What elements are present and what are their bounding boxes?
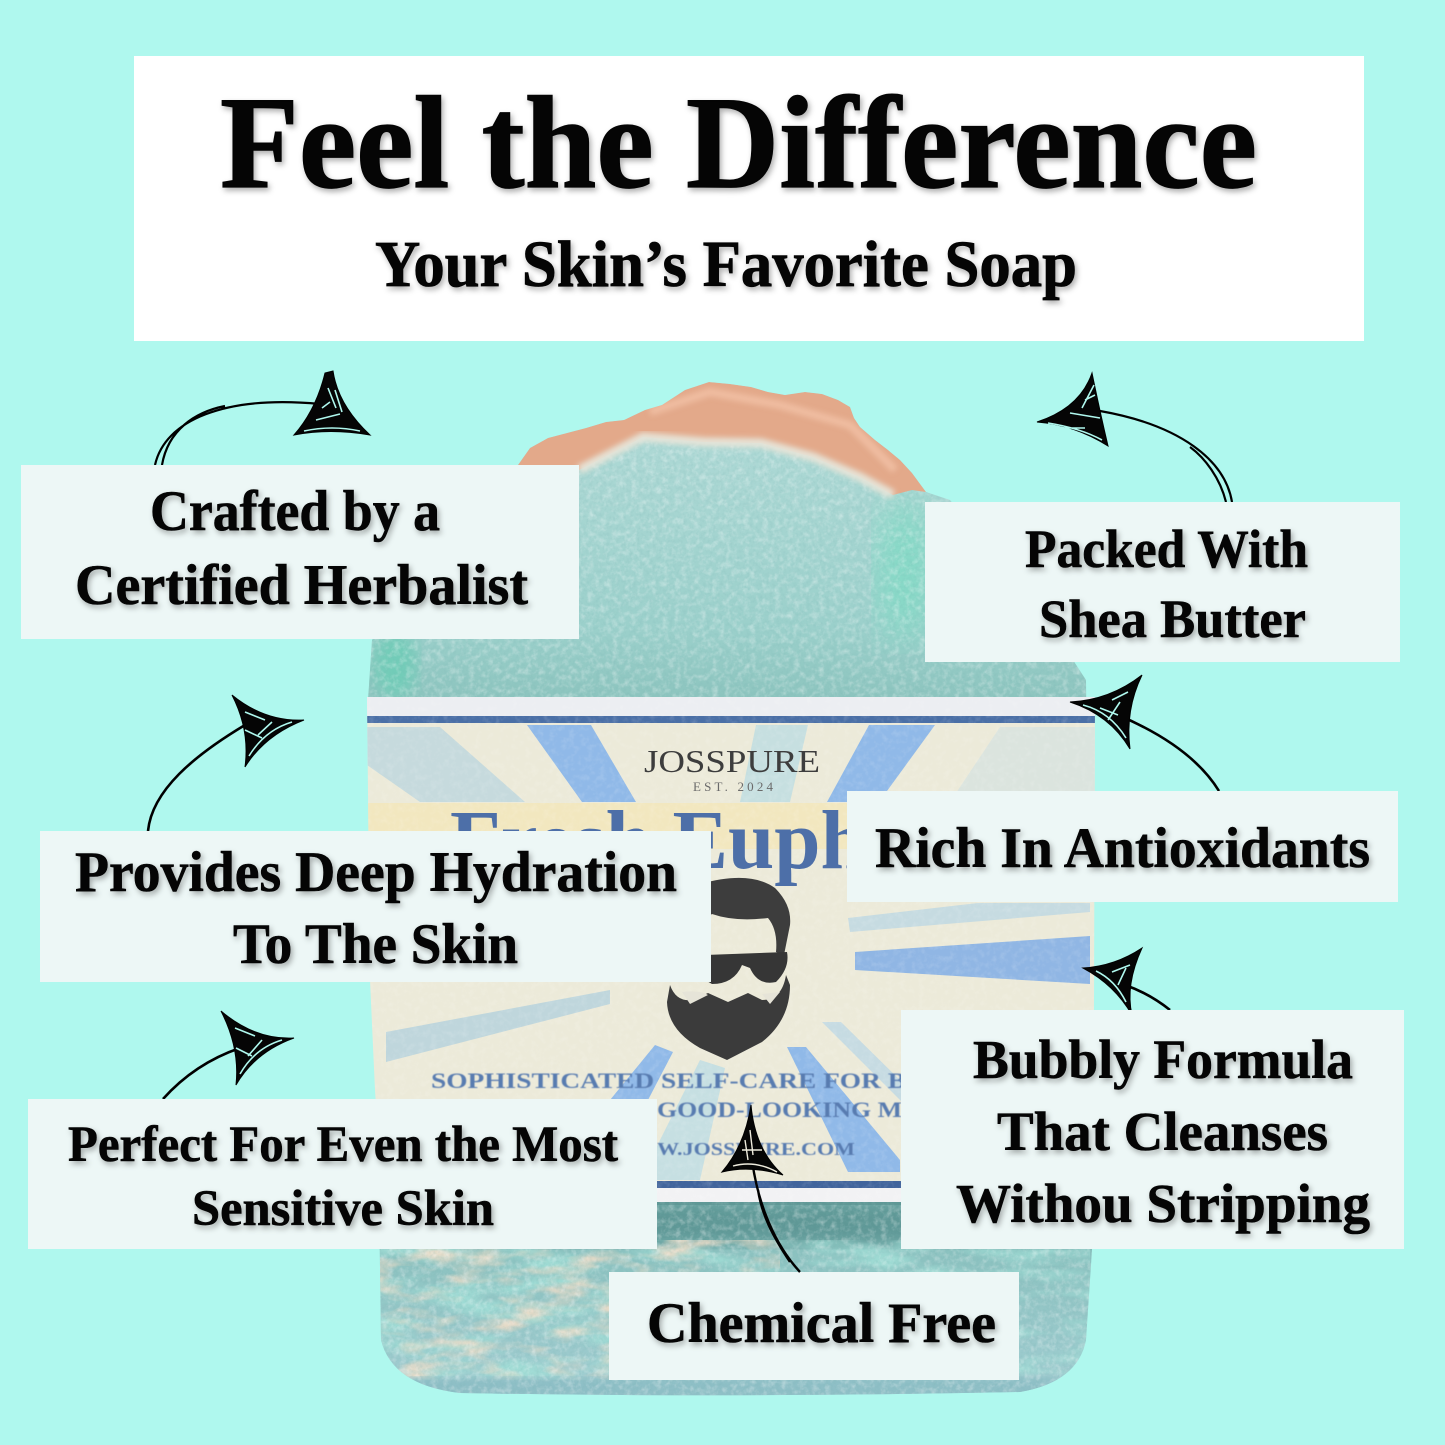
panel: deep hydration <box>40 831 711 982</box>
text line 1: Bubbly Formula <box>973 1029 1353 1090</box>
label text: website: W.JOSSPURE.COM <box>657 1139 855 1159</box>
product label <box>367 697 1095 1205</box>
main heading: Feel the Difference <box>220 69 1257 216</box>
sunglasses <box>705 952 788 984</box>
label text: product name: Fresh Euphoria <box>450 794 1010 887</box>
text line 2: Certified Herbalist <box>75 554 528 617</box>
subheading: Your Skin’s Favorite Soap <box>375 228 1077 301</box>
label text: tagline 1: SOPHISTICATED SELF-CARE FOR B <box>431 1068 906 1093</box>
arrow: chemical free <box>722 1105 800 1272</box>
text line 2: Sensitive Skin <box>192 1181 494 1237</box>
text line 2: To The Skin <box>233 913 518 976</box>
panel: crafted by a herbalist <box>21 465 579 639</box>
panel: sensitive skin <box>28 1099 657 1249</box>
title panel <box>134 56 1364 341</box>
panel: bubbly formula <box>901 1010 1404 1249</box>
text line 1: Provides Deep Hydration <box>75 841 677 904</box>
text line 3: Withou Stripping <box>956 1173 1370 1234</box>
label rays <box>367 725 1095 1180</box>
text: Rich In Antioxidants <box>875 817 1370 880</box>
label text: brand: JOSSPURE <box>644 743 820 779</box>
text: Chemical Free <box>647 1292 996 1355</box>
panel: chemical free <box>609 1272 1019 1380</box>
arrow: deep hydration <box>148 695 304 831</box>
text line 2: Shea Butter <box>1039 589 1306 649</box>
beard <box>667 975 790 1060</box>
text line 1: Crafted by a <box>150 480 440 543</box>
label text: tagline 2: GOOD-LOOKING M <box>657 1097 902 1122</box>
arrow: crafted by a herbalist <box>155 371 370 465</box>
text line 1: Packed With <box>1025 519 1308 579</box>
peach top layer <box>510 382 926 495</box>
label text: established: EST. 2024 <box>693 779 774 794</box>
soap bar photo <box>360 370 1100 1400</box>
panel: rich in antioxidants <box>847 791 1398 902</box>
hair <box>711 878 790 952</box>
text line 2: That Cleanses <box>997 1101 1328 1162</box>
arrow: sensitive skin <box>163 1011 294 1099</box>
text line 1: Perfect For Even the Most <box>68 1117 618 1173</box>
panel: packed with shea butter <box>925 502 1400 662</box>
arrow: packed with shea butter <box>1037 373 1232 502</box>
arrow: antioxidants <box>1070 675 1219 791</box>
cheek highlights <box>682 991 780 1004</box>
arrow: bubbly formula <box>1083 948 1170 1015</box>
logo: bearded man <box>667 878 790 1060</box>
